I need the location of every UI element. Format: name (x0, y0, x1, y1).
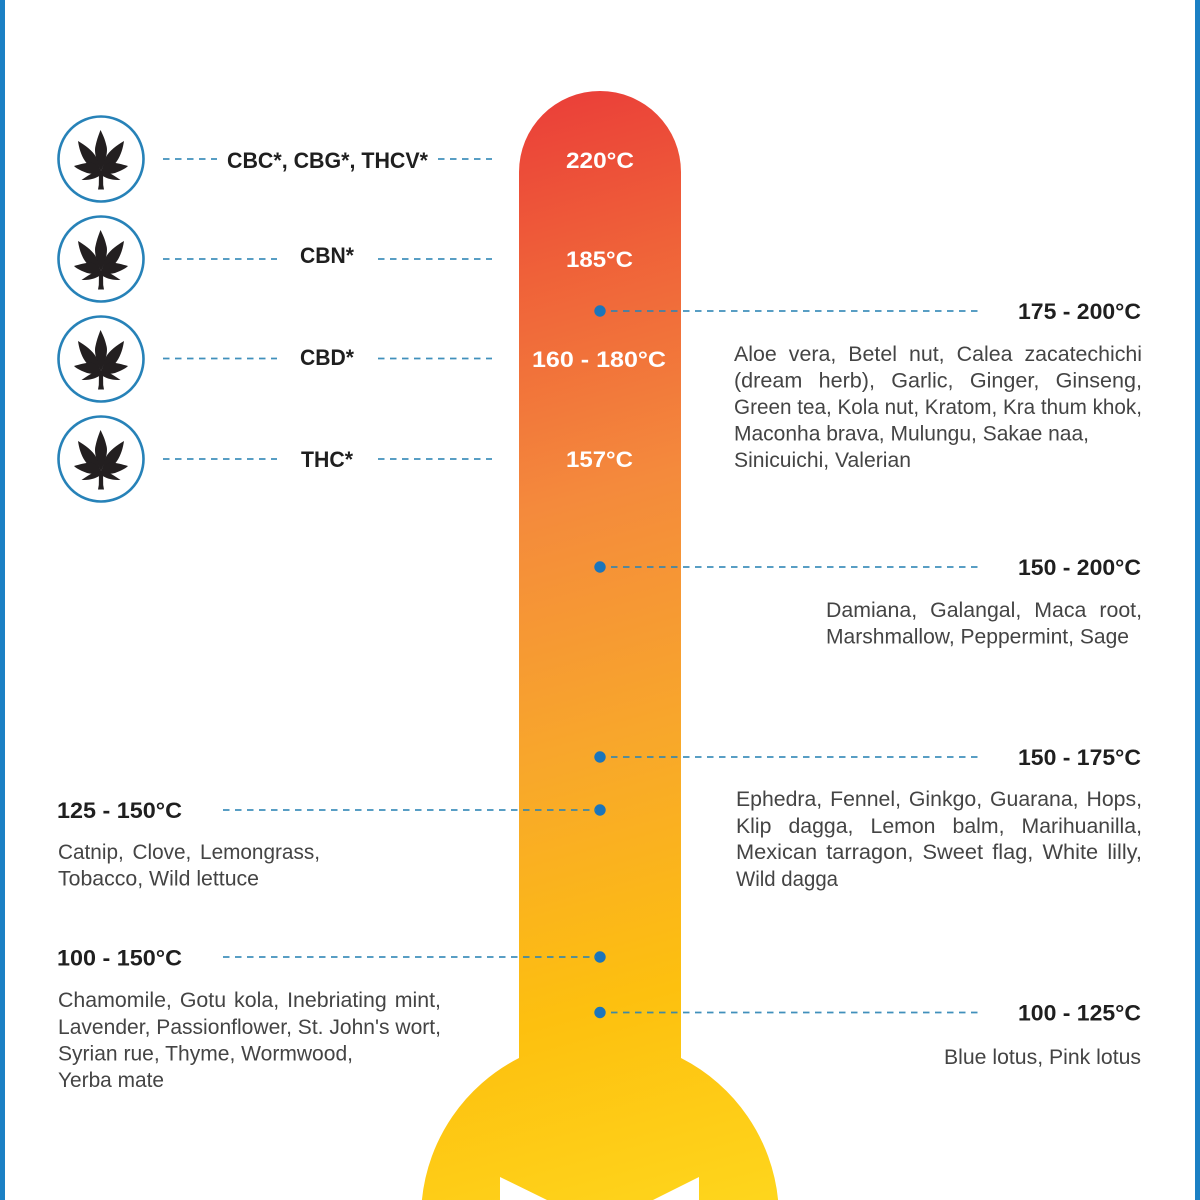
callout: 125-150 (57, 798, 606, 890)
thermometer temperature labels: 157°C (566, 447, 633, 472)
callout: 150-200 (594, 555, 1142, 648)
callout: 150-175: Ephedra, Fennel, Ginkgo, Guarana, Hops, (736, 788, 1142, 811)
callout: 100-125: 100 - 125°C (1018, 1000, 1141, 1026)
callout: 175-200: Green tea, Kola nut, Kratom, Kra thum khok, (734, 396, 1142, 419)
callout: 150-200: Damiana, Galangal, Maca root, (826, 599, 1142, 622)
cannabinoid row: THC (58, 416, 492, 502)
callout: 175-200: Aloe vera, Betel nut, Calea zacatechichi (734, 343, 1142, 366)
callout: 100-150: Chamomile, Gotu kola, Inebriating mint, (58, 989, 441, 1012)
thermometer (422, 91, 778, 1200)
callout: 150-200: 150 - 200°C (1018, 555, 1141, 580)
callout: 125-150: 125 - 150°C (57, 798, 182, 823)
callout: 175-200: 175 - 200°C (1018, 299, 1141, 324)
callout: 150-175: Klip dagga, Lemon balm, Marihuanilla, (736, 815, 1142, 838)
callout: 150-175: Mexican tarragon, Sweet flag, White lilly, (736, 841, 1142, 864)
callout: 175-200: Sinicuichi, Valerian (734, 449, 911, 472)
icon: cannabis leaf (58, 116, 144, 202)
callout: 175-200 (594, 299, 1142, 472)
callout: 100-150: Syrian rue, Thyme, Wormwood, (58, 1042, 353, 1066)
callout: 150-200: Marshmallow, Peppermint, Sage (826, 626, 1129, 648)
cannabinoid row: CBD (58, 316, 492, 402)
cannabinoid row: CBC, CBG, THCV: CBC*, CBG*, THCV* (227, 148, 428, 173)
cannabinoid row: CBC, CBG, THCV (58, 116, 492, 202)
thermometer temperature labels: 220°C (566, 148, 634, 173)
callout: 100-125: Blue lotus, Pink lotus (944, 1046, 1141, 1069)
callout: 100-150: Yerba mate (58, 1069, 164, 1092)
callout: 150-175 (594, 745, 1142, 891)
icon: cannabis leaf (58, 416, 144, 502)
thermometer temperature labels: 185°C (566, 247, 633, 272)
left border bar (0, 0, 5, 1200)
callout: 150-175: Wild dagga (736, 868, 838, 891)
cannabinoid row: CBD: CBD* (300, 345, 354, 370)
callout: 100-150 (57, 946, 606, 1092)
right border bar (1195, 0, 1200, 1200)
callout: 125-150: Tobacco, Wild lettuce (58, 868, 259, 890)
cannabinoid row: THC: THC* (301, 447, 353, 472)
callout: 100-150: Lavender, Passionflower, St. John's wort, (58, 1016, 441, 1039)
icon: cannabis leaf (58, 216, 144, 302)
callout: 175-200: Maconha brava, Mulungu, Sakae naa, (734, 422, 1089, 446)
callout: 125-150: Catnip, Clove, Lemongrass, (58, 841, 320, 864)
callout: 175-200: (dream herb), Garlic, Ginger, Ginseng, (734, 370, 1142, 392)
cannabinoid row: CBN (58, 216, 492, 302)
icon: cannabis leaf (58, 316, 144, 402)
cannabinoid row: CBN: CBN* (300, 243, 354, 268)
callout: 100-125 (594, 1000, 1141, 1069)
thermometer temperature labels: 160 - 180°C (532, 347, 666, 372)
callout: 100-150: 100 - 150°C (57, 946, 182, 970)
thermometer temperature labels (532, 148, 666, 472)
callout: 150-175: 150 - 175°C (1018, 745, 1141, 770)
